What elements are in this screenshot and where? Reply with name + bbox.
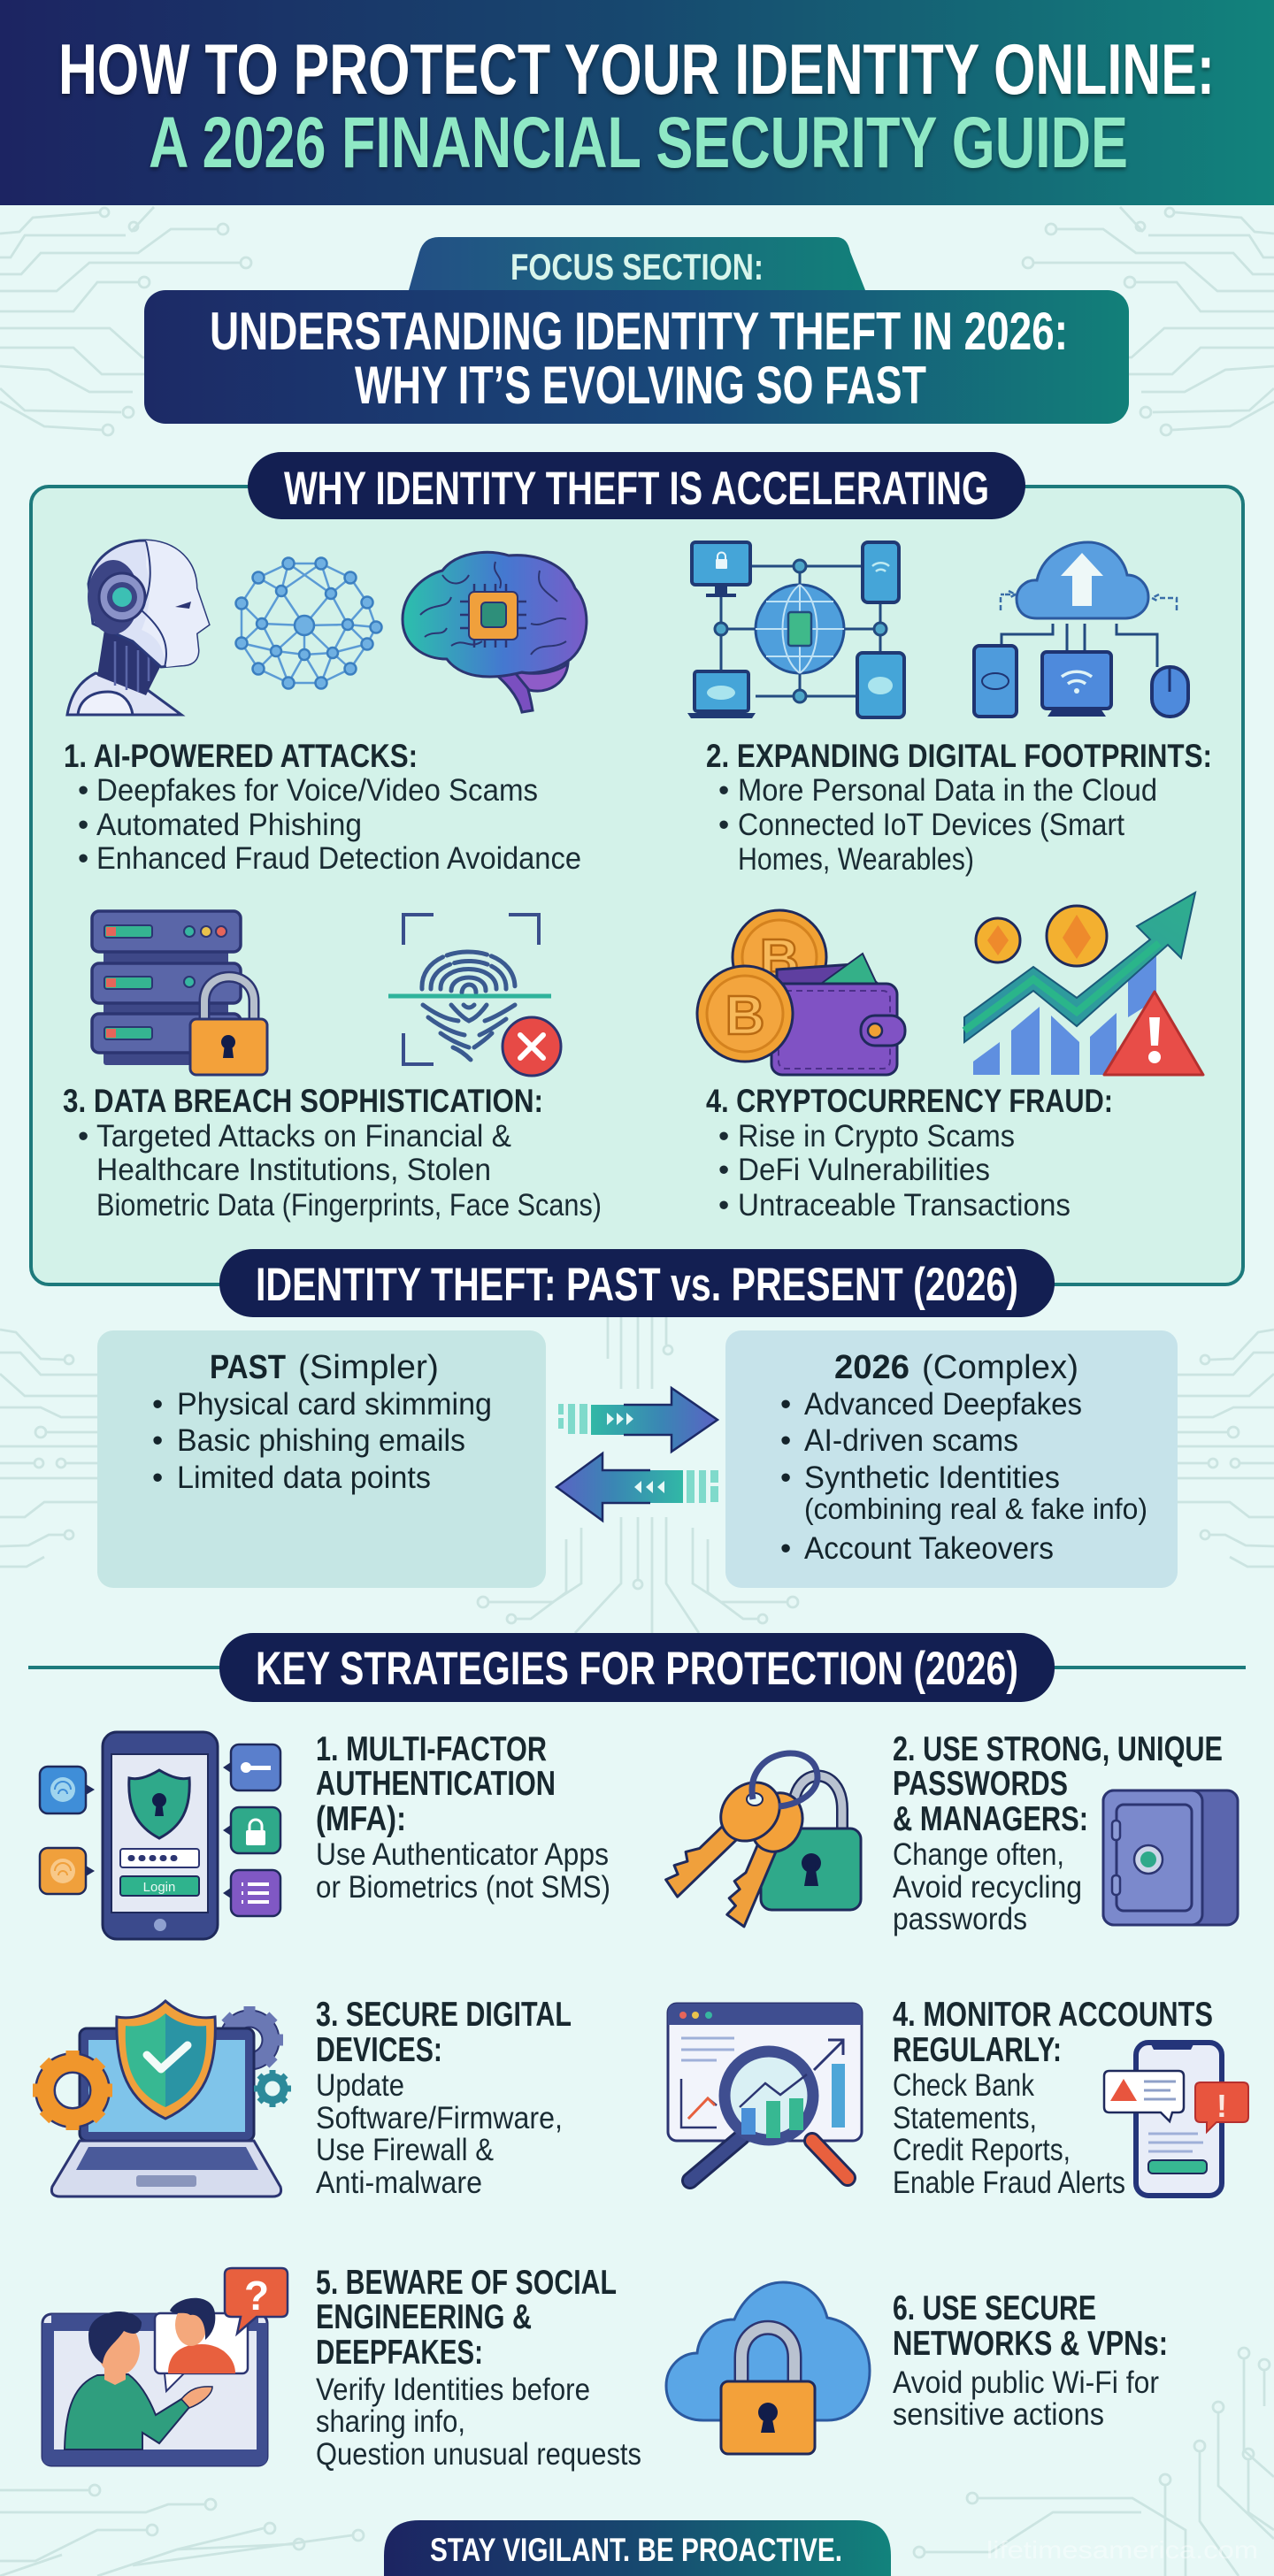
icon: phone with login and factor chips: [40, 1732, 280, 1939]
strategy 3: secure digital devices: Use Firewall &: [316, 2133, 494, 2167]
text: 2 expanding digital footprints: •: [718, 773, 729, 808]
text: 1 AI-powered attacks: •: [78, 808, 88, 842]
strategy 5: social engineering and deepfakes: 5. BEWARE OF SOCIAL: [316, 2264, 617, 2302]
strategy 3: secure digital devices: Anti-malware: [316, 2166, 482, 2200]
icon: phone with fraud alerts: !: [1216, 2088, 1227, 2124]
strategy 1: multi-factor authentication: [40, 1730, 610, 1939]
strategy 6: secure networks and VPNs: Avoid public Wi-Fi for: [893, 2365, 1159, 2400]
heading pill: past vs present: [219, 1249, 1055, 1317]
panel: why identity theft is accelerating: [31, 487, 1243, 1284]
text: 4 cryptocurrency fraud: •: [718, 1119, 729, 1154]
icon: video call with deepfake question: ?: [244, 2273, 269, 2319]
text: 1 AI-powered attacks: [64, 738, 581, 876]
comparison card: past: •: [152, 1423, 163, 1458]
text: 1 AI-powered attacks: Automated Phishing: [96, 808, 362, 842]
text: 4 cryptocurrency fraud: Rise in Crypto Scams: [738, 1119, 1015, 1154]
text: 4 cryptocurrency fraud: •: [718, 1153, 729, 1187]
strategy 4: monitor accounts: REGULARLY:: [893, 2031, 1062, 2069]
comparison card: 2026: Advanced Deepfakes: [804, 1387, 1082, 1422]
text: 1 AI-powered attacks: Deepfakes for Voice/Video Scams: [96, 773, 538, 808]
comparison card: 2026: AI-driven scams: [804, 1423, 1018, 1458]
icon: keys and green padlock: [652, 1753, 861, 1932]
strategy 3: secure digital devices: [33, 1996, 572, 2200]
comparison card: 2026: •: [780, 1531, 791, 1566]
text: 3 data breach sophistication: Biometric Data (Fingerprints, Face Scans): [96, 1188, 602, 1223]
strategy 1: multi-factor authentication: or Biometrics (not SMS): [316, 1870, 610, 1905]
text: 2 expanding digital footprints: More Personal Data in the Cloud: [738, 773, 1157, 808]
cloud with devices: [1001, 591, 1177, 610]
comparison card: 2026: Account Takeovers: [804, 1531, 1054, 1566]
icon: phone with login and factor chips: Login: [143, 1880, 175, 1895]
strategy 5: social engineering and deepfakes: Question unusual requests: [316, 2437, 641, 2472]
strategy 5: social engineering and deepfakes: sharing info,: [316, 2404, 465, 2439]
comparison card: past: [97, 1330, 546, 1588]
text: 1 AI-powered attacks: •: [78, 841, 88, 876]
title: [58, 30, 1215, 183]
icon: crypto wallet: B: [725, 985, 764, 1046]
icon: phone with fraud alerts: [1104, 2043, 1248, 2196]
strategy 3: secure digital devices: Software/Firmware,: [316, 2101, 563, 2135]
comparison card: 2026: 2026: [834, 1349, 909, 1386]
strategy 5: social engineering and deepfakes: ENGINEERING &: [316, 2298, 532, 2336]
comparison card: past: PAST: [210, 1349, 286, 1386]
watermark: lifetimesamerica.com: [986, 2536, 1258, 2564]
strategy 2: strong passwords and managers: [652, 1730, 1238, 1936]
header banner: [0, 0, 1274, 205]
strategy 3: secure digital devices: Update: [316, 2068, 404, 2103]
text: 1 AI-powered attacks: Enhanced Fraud Detection Avoidance: [96, 841, 581, 876]
heading pill: past vs present: IDENTITY THEFT: PAST vs. PRESENT (2026): [256, 1259, 1018, 1311]
arrow: present to past: [556, 1453, 718, 1521]
strategy 6: secure networks and VPNs: 6. USE SECURE: [893, 2289, 1096, 2327]
focus section tab: FOCUS SECTION:: [510, 246, 764, 288]
icon: AI brain with chip: [403, 552, 587, 712]
comparison card: 2026: •: [780, 1460, 791, 1495]
strategy 5: social engineering and deepfakes: Verify Identities before: [316, 2373, 590, 2407]
focus section tab: [409, 237, 865, 290]
strategy 2: strong passwords and managers: Change often,: [893, 1837, 1064, 1872]
strategy 4: monitor accounts: Credit Reports,: [893, 2133, 1071, 2167]
icon: cloud with padlock: [666, 2282, 870, 2454]
icon: video call with deepfake question: [42, 2268, 288, 2465]
heading pill: why identity theft is accelerating: [248, 452, 1025, 519]
icon: neural network: [235, 557, 382, 688]
text: 2 expanding digital footprints: [706, 738, 1212, 877]
strategy 4: monitor accounts: Enable Fraud Alerts: [893, 2166, 1125, 2200]
text: 2 expanding digital footprints: Connected IoT Devices (Smart: [738, 808, 1124, 842]
heading pill: why identity theft is accelerating: WHY IDENTITY THEFT IS ACCELERATING: [284, 463, 989, 515]
comparison card: past: Physical card skimming: [177, 1387, 492, 1422]
strategy 1: multi-factor authentication: 1. MULTI-FACTOR: [316, 1730, 547, 1768]
strategy 4: monitor accounts: [668, 1996, 1248, 2200]
text: 4 cryptocurrency fraud: Untraceable Transactions: [738, 1188, 1071, 1223]
strategy 3: secure digital devices: 3. SECURE DIGITAL: [316, 1996, 572, 2034]
text: 1 AI-powered attacks: 1. AI-POWERED ATTACKS:: [64, 738, 418, 774]
text: 3 data breach sophistication: [63, 1083, 602, 1223]
text: 3 data breach sophistication: •: [78, 1119, 88, 1154]
text: 4 cryptocurrency fraud: 4. CRYPTOCURRENCY FRAUD:: [706, 1083, 1113, 1119]
icon: connected devices network: [687, 542, 1188, 718]
comparison card: past: •: [152, 1460, 163, 1495]
strategy 2: strong passwords and managers: & MANAGERS:: [893, 1800, 1088, 1838]
comparison card: 2026: •: [780, 1387, 791, 1422]
text: 2 expanding digital footprints: •: [718, 808, 729, 842]
strategy 6: secure networks and VPNs: NETWORKS & VPNs:: [893, 2325, 1168, 2363]
text: 3 data breach sophistication: 3. DATA BREACH SOPHISTICATION:: [63, 1083, 543, 1119]
focus banner heading: WHY IT’S EVOLVING SO FAST: [355, 356, 926, 415]
strategy 1: multi-factor authentication: (MFA):: [316, 1800, 406, 1838]
strategy 4: monitor accounts: Check Bank: [893, 2068, 1034, 2103]
focus banner heading: [144, 290, 1129, 424]
strategy 1: multi-factor authentication: Use Authenticator Apps: [316, 1837, 609, 1872]
heading pill: key strategies: [219, 1633, 1055, 1702]
strategy 3: secure digital devices: DEVICES:: [316, 2031, 442, 2069]
icon: password safe: [1103, 1790, 1238, 1925]
strategy 5: social engineering and deepfakes: [42, 2264, 641, 2472]
comparison card: 2026: Synthetic Identities: [804, 1460, 1060, 1495]
comparison card: past: •: [152, 1387, 163, 1422]
comparison card: past: Basic phishing emails: [177, 1423, 465, 1458]
text: 1 AI-powered attacks: •: [78, 773, 88, 808]
strategy 5: social engineering and deepfakes: DEEPFAKES:: [316, 2334, 483, 2372]
text: 3 data breach sophistication: Targeted Attacks on Financial &: [96, 1119, 511, 1154]
comparison card: past: (Simpler): [298, 1349, 439, 1386]
footer call to action: [384, 2520, 891, 2576]
text: 3 data breach sophistication: Healthcare Institutions, Stolen: [96, 1153, 491, 1187]
icon: server with lock: [92, 911, 267, 1075]
strategy 2: strong passwords and managers: Avoid recycling: [893, 1870, 1082, 1905]
text: 4 cryptocurrency fraud: •: [718, 1188, 729, 1223]
icon: crypto wallet: [697, 910, 905, 1075]
strategy 1: multi-factor authentication: AUTHENTICATION: [316, 1765, 556, 1803]
comparison card: past: Limited data points: [177, 1460, 431, 1495]
comparison card: 2026: (Complex): [922, 1349, 1078, 1386]
strategy 6: secure networks and VPNs: [666, 2282, 1168, 2454]
icon: AI robot head: [67, 540, 209, 715]
comparison card: 2026: [725, 1330, 1178, 1588]
strategy 2: strong passwords and managers: PASSWORDS: [893, 1765, 1068, 1803]
comparison card: 2026: (combining real & fake info): [804, 1492, 1147, 1525]
comparison card: 2026: •: [780, 1423, 791, 1458]
text: 4 cryptocurrency fraud: [706, 1083, 1113, 1223]
icon: laptop with shield and gears: [33, 2001, 291, 2196]
arrow: past to present: [558, 1388, 718, 1452]
footer call to action: STAY VIGILANT. BE PROACTIVE.: [430, 2532, 842, 2568]
strategy 4: monitor accounts: Statements,: [893, 2101, 1037, 2135]
strategy 6: secure networks and VPNs: sensitive actions: [893, 2397, 1104, 2432]
heading pill: key strategies: KEY STRATEGIES FOR PROTECTION (2026): [256, 1643, 1018, 1695]
icon: crypto fraud chart: [964, 893, 1203, 1075]
text: 2 expanding digital footprints: Homes, Wearables): [738, 842, 974, 877]
icon: dashboard with magnifier: [668, 2004, 862, 2181]
icon: crypto wallet: B: [760, 929, 799, 990]
strategy 2: strong passwords and managers: passwords: [893, 1902, 1027, 1936]
text: 4 cryptocurrency fraud: DeFi Vulnerabilities: [738, 1153, 990, 1187]
icon: fingerprint scan blocked: [388, 915, 561, 1076]
